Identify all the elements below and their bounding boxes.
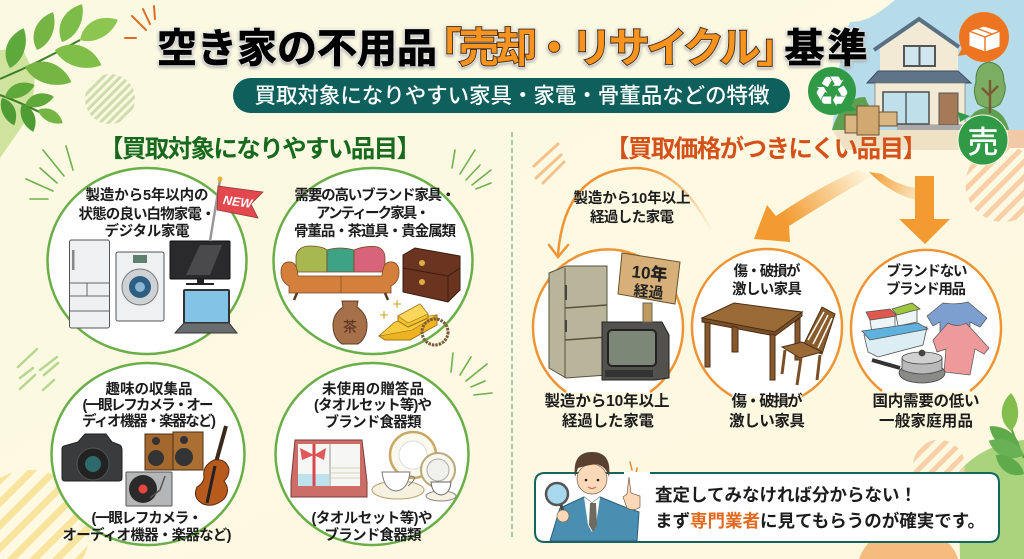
callout text	[655, 485, 985, 531]
title: 空き家の不用品	[157, 27, 437, 71]
sign: 10 years elapsed: 経過	[633, 283, 664, 303]
icon: television	[170, 241, 230, 285]
icon: laptop	[175, 290, 237, 333]
icon: tree	[974, 62, 1005, 113]
icon: refrigerator	[70, 240, 110, 328]
icon: tea jar	[333, 301, 367, 344]
panel: household goods	[851, 250, 1001, 391]
arrow: down to household goods	[869, 172, 950, 244]
label: damaged top: 激しい家具	[732, 281, 802, 298]
icon: speakers	[145, 432, 203, 470]
icon: tableware	[372, 432, 456, 501]
label: hobby bottom: (一眼レフカメラ・	[92, 510, 202, 527]
callout text: 査定してみなければ分からない！	[655, 485, 917, 505]
icon: turntable	[126, 472, 172, 506]
label: hobby top: (一眼レフカメラ・オー	[82, 397, 214, 414]
icon: gift box	[291, 440, 367, 497]
label: gifts top: (タオルセット等)や	[314, 396, 432, 414]
leaves top-left	[0, 0, 122, 134]
panel: home appliances	[48, 168, 263, 354]
leaves bottom-right	[984, 393, 1024, 481]
labels: right panel captions: 国内需要の低い	[872, 392, 980, 410]
label: gifts top: ブランド食器類	[324, 413, 422, 431]
label: old appliances top	[574, 189, 690, 226]
labels: right panel captions: 激しい家具	[729, 412, 805, 430]
label: damaged top	[732, 262, 802, 298]
icon: appraiser with magnifier	[546, 452, 640, 541]
labels: right panel captions: 傷・破損が	[732, 391, 803, 410]
callout	[535, 452, 999, 542]
label: brand top: ブランドない	[886, 262, 968, 280]
label: hobby top: 趣味の収集品	[106, 380, 192, 398]
label: hobby top: ディオ機器・楽器など)	[82, 412, 216, 430]
label: brand top: ブランド用品	[886, 280, 966, 298]
icon: sofa	[281, 246, 399, 300]
labels: right panel captions: 経過した家電	[562, 412, 654, 430]
panel: hobby collectibles	[52, 363, 244, 545]
icon: frying pan and pot	[872, 350, 945, 383]
panel: brand furniture and antiques	[274, 168, 472, 354]
label: gifts bottom: (タオルセット等)や	[312, 509, 432, 527]
label: appliances: 状態の良い白物家電・	[78, 205, 216, 223]
label: hobby bottom: オーディオ機器・楽器など)	[62, 526, 232, 544]
label: appliances: 製造から5年以内の	[86, 186, 208, 204]
flag: NEW	[210, 176, 263, 241]
title	[157, 25, 868, 71]
arrow: diagonal to damaged furniture	[754, 170, 872, 242]
spark accents	[18, 6, 637, 474]
icon: t-shirts	[927, 302, 989, 375]
subtitle pill: 買取対象になりやすい家具・家電・骨董品などの特徴	[254, 84, 770, 108]
title: 「売却・リサイクル」	[421, 25, 798, 71]
heading: items hard to price: 【買取価格がつきにくい品目】	[605, 134, 927, 163]
icon: camera	[62, 434, 122, 481]
flag: NEW: NEW	[222, 193, 254, 211]
icon: antique chest	[403, 248, 460, 302]
label: furniture: 需要の高いブランド家具・	[294, 186, 456, 204]
label: gifts bottom	[312, 509, 432, 544]
arrow: curved arc to old appliances	[549, 168, 712, 257]
icon: gold bars and beads	[379, 300, 448, 345]
icon: sell badge: 売	[968, 125, 998, 160]
icon: chair	[782, 307, 835, 385]
icon: old CRT television	[602, 322, 669, 380]
icon: parcel badge	[958, 12, 1009, 62]
icon: tea jar: 茶	[343, 319, 357, 335]
title: 基準	[784, 27, 868, 71]
label: furniture	[294, 186, 456, 240]
labels: right panel captions: 一般家庭用品	[879, 411, 973, 430]
icon: violin	[195, 426, 229, 505]
sign: 10 years elapsed: 10年	[631, 261, 669, 285]
icon: table	[702, 303, 802, 380]
label: furniture: アンティーク家具・	[316, 205, 430, 222]
label: old appliances top: 製造から10年以上	[574, 189, 690, 207]
label: gifts top: 未使用の贈答品	[322, 380, 424, 398]
icon: washing machine	[116, 252, 164, 321]
label: damaged top: 傷・破損が	[734, 262, 801, 280]
label: gifts top	[314, 380, 432, 431]
panel: old appliances	[533, 249, 683, 392]
heading: items likely to be purchased: 【買取対象になりやすい品目】	[99, 135, 421, 163]
icon: food containers	[862, 303, 928, 357]
divider	[511, 132, 513, 540]
panel: damaged furniture	[692, 249, 842, 396]
subtitle pill	[233, 78, 790, 113]
panel: unused gifts and tableware	[276, 363, 468, 545]
house illustration	[832, 19, 1009, 135]
sign: 10 years elapsed	[618, 253, 680, 322]
label: appliances: デジタル家電	[104, 222, 190, 240]
labels: right panel captions: 製造から10年以上	[544, 391, 670, 410]
labels: right panel captions	[544, 391, 980, 430]
icon: recycle badge: ♻	[813, 67, 851, 116]
label: hobby bottom	[62, 510, 232, 544]
label: hobby top	[82, 380, 216, 430]
icon: sell badge	[958, 112, 1008, 165]
label: furniture: 骨董品・茶道具・貴金属類	[294, 222, 456, 240]
label: old appliances top: 経過した家電	[590, 209, 674, 226]
label: gifts bottom: ブランド食器類	[324, 526, 422, 544]
icon: old refrigerator	[549, 266, 607, 378]
callout text: まず専門業者に見てもらうのが確実です。	[655, 511, 985, 531]
label: brand top	[886, 262, 968, 298]
label: appliances	[78, 186, 216, 240]
